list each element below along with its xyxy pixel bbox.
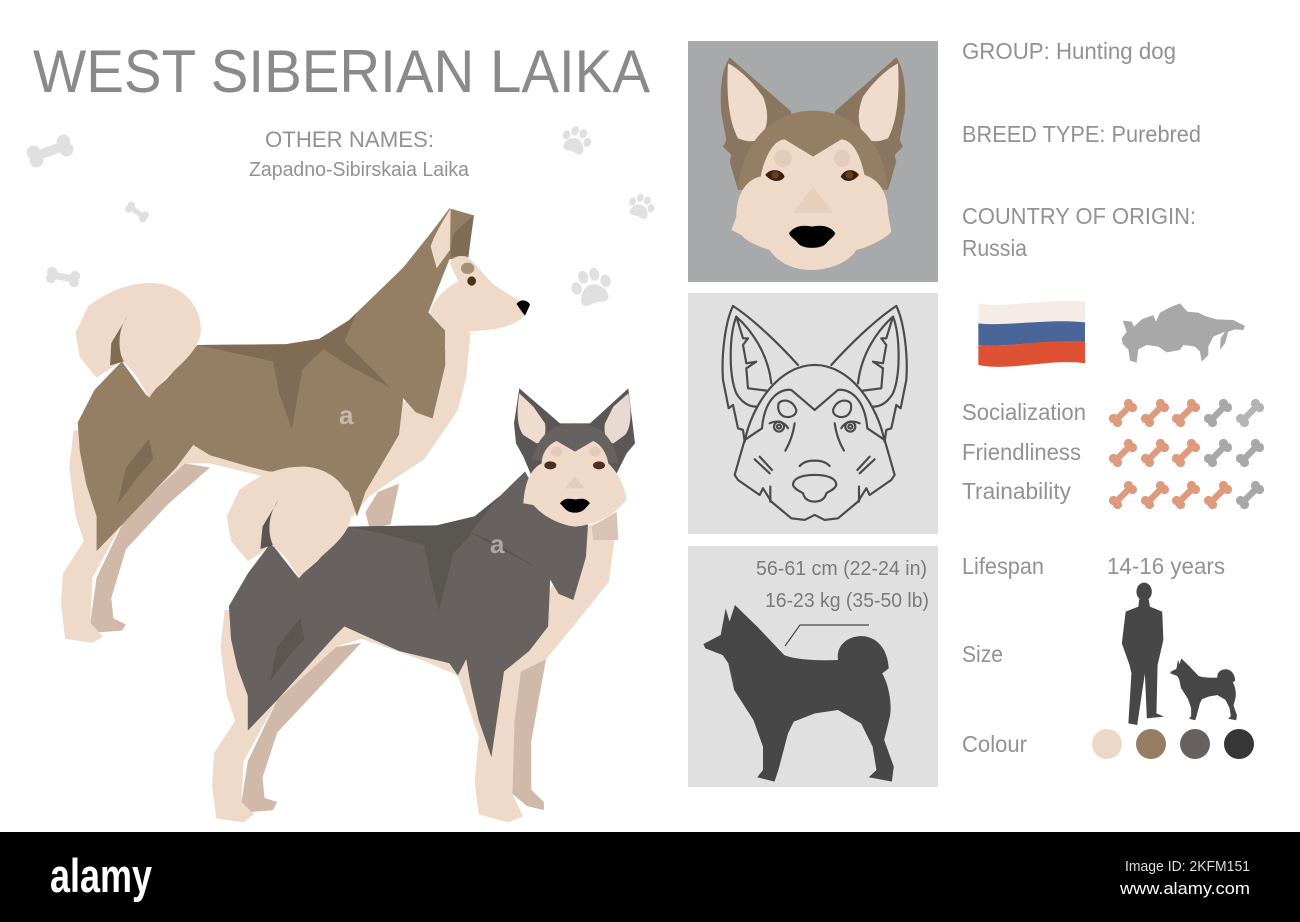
- watermarks: a: [490, 529, 505, 559]
- title: WEST SIBERIAN LAIKA: [33, 38, 650, 105]
- other names: OTHER NAMES:: [265, 127, 434, 152]
- rating: friendliness: [962, 439, 1264, 467]
- other names: [249, 127, 470, 181]
- rating: trainability: [962, 478, 1264, 509]
- country of origin: COUNTRY OF ORIGIN:: [962, 203, 1196, 229]
- watermarks: [339, 400, 938, 700]
- icon: russian flag: [978, 301, 1085, 367]
- panel: colour face: [688, 41, 938, 282]
- footer bar: www.alamy.com: [1119, 879, 1250, 898]
- lifespan: 14-16 years: [1107, 553, 1225, 579]
- country of origin: [962, 203, 1196, 261]
- panel: outline face: [688, 293, 938, 534]
- colour swatches: Colour: [962, 731, 1027, 757]
- country of origin: Russia: [962, 235, 1027, 261]
- watermarks: ala: [889, 648, 938, 700]
- footer bar: [0, 832, 1300, 922]
- footer bar: alamy: [50, 849, 152, 902]
- dog: dark grey west siberian laika: [212, 388, 635, 822]
- rating: socialization: Socialization: [962, 399, 1086, 425]
- size comparison: [962, 583, 1237, 725]
- panel: silhouette with size: 16-23 kg (35-50 lb): [765, 590, 929, 612]
- panel: silhouette with size: 56-61 cm (22-24 in): [756, 558, 927, 580]
- rating: trainability: Trainability: [962, 478, 1071, 504]
- lifespan: [962, 553, 1225, 579]
- rating: friendliness: Friendliness: [962, 439, 1081, 465]
- colour swatches: [962, 729, 1254, 759]
- background bones and paws: [22, 123, 658, 309]
- breed type: BREED TYPE: Purebred: [962, 121, 1201, 147]
- size comparison: Size: [962, 641, 1003, 667]
- icon: map of russia: [1122, 303, 1245, 363]
- lifespan: Lifespan: [962, 553, 1044, 579]
- other names: Zapadno-Sibirskaia Laika: [249, 159, 470, 181]
- footer bar: Image ID: 2KFM151: [1125, 858, 1250, 875]
- rating: socialization: [962, 399, 1264, 427]
- dog: tan west siberian laika: [61, 208, 530, 643]
- panel: silhouette with size: [688, 546, 938, 787]
- group: GROUP: Hunting dog: [962, 38, 1176, 64]
- watermarks: a: [339, 400, 354, 430]
